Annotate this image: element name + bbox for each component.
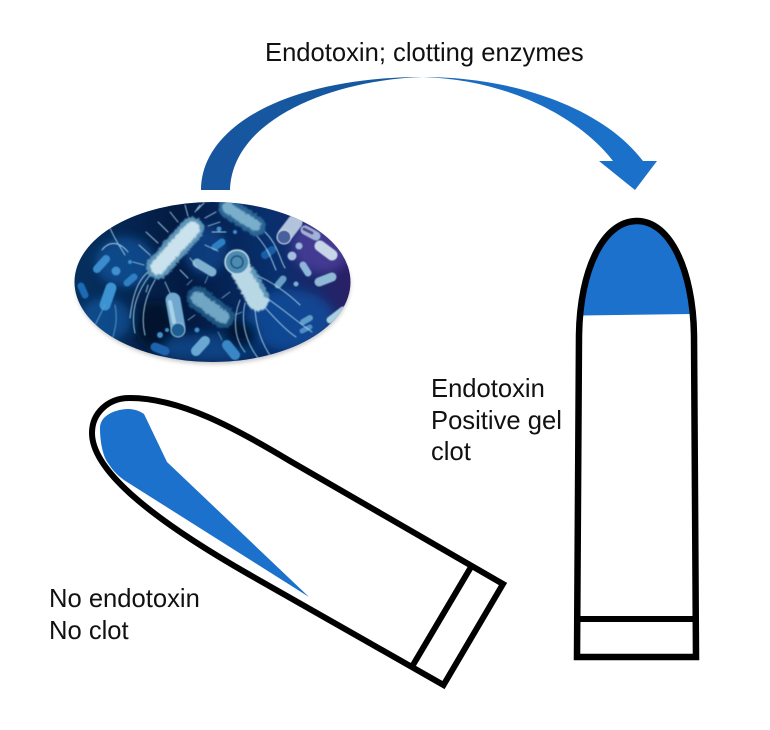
bacterium: central rod (225, 250, 267, 300)
small background rods (81, 203, 343, 355)
bacterium: top spiky rod (228, 208, 256, 226)
label: endotoxin positive gel clot: Positive gel (431, 407, 562, 435)
small spheres (112, 226, 302, 338)
bacterium: short rod (170, 300, 185, 337)
liquid pooled in tilted tube (100, 409, 309, 597)
label: no endotoxin no clot: No endotoxin (49, 585, 200, 613)
label: endotoxin positive gel clot: clot (431, 438, 471, 466)
gel clot at top of upright tube (581, 221, 692, 316)
tube: tilted no clot tube (92, 398, 503, 685)
icon: bacteria oval illustration (70, 198, 355, 368)
flagella (92, 228, 312, 358)
label: endotoxin positive gel clot: Endotoxin (431, 375, 545, 403)
bacterium: dark spiky rod (187, 276, 242, 340)
label: no endotoxin no clot: No clot (49, 617, 129, 645)
tube: upright endotoxin positive tube (577, 221, 696, 657)
arrow: curved from bacteria to upright tube (201, 77, 657, 190)
title: endotoxin and clotting enzymes label: Endotoxin; clotting enzymes (265, 39, 584, 67)
bacteria: pale rods at upper right (277, 222, 332, 255)
bacterium: large spiky rod (133, 203, 226, 293)
